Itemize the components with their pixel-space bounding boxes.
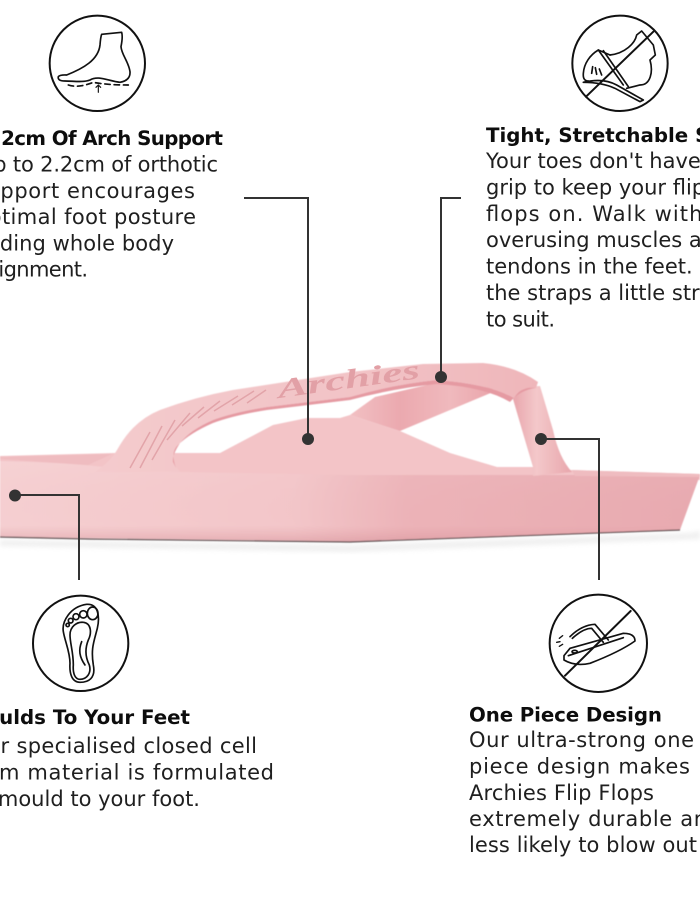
embossed logo on strap: Archies	[272, 354, 421, 404]
body: one piece design: Archies Flip Flops	[469, 781, 654, 805]
icon: toes gripping crossed out	[572, 16, 668, 111]
body: moulds to your feet	[0, 734, 274, 811]
body: one piece design: piece design makes	[469, 754, 690, 778]
body: stretchable straps: to suit.	[486, 308, 555, 332]
body: one piece design: Our ultra-strong one	[469, 728, 694, 752]
text block: one piece design	[469, 704, 700, 857]
icon: footprint	[33, 596, 128, 691]
body: arch support	[0, 152, 218, 282]
flip flop product image	[0, 354, 700, 552]
body: one piece design	[469, 728, 700, 857]
heading: one piece design: One Piece Design	[469, 704, 662, 726]
text block: moulds to your feet	[0, 706, 274, 811]
icon: broken flip flop crossed out	[550, 595, 647, 692]
callout line: arch support	[244, 198, 314, 445]
text block: arch support	[0, 127, 223, 282]
text block: stretchable straps	[485, 124, 700, 332]
body: stretchable straps: grip to keep your flip	[486, 176, 700, 200]
body: stretchable straps	[485, 149, 700, 332]
callout line: moulds to feet	[9, 490, 79, 580]
callout line: stretchable straps	[435, 198, 461, 383]
strap hatch embossing	[130, 390, 266, 468]
callout line: one piece design	[535, 433, 599, 580]
body: one piece design: less likely to blow out	[469, 833, 697, 857]
icon: foot with arch support	[50, 16, 145, 111]
